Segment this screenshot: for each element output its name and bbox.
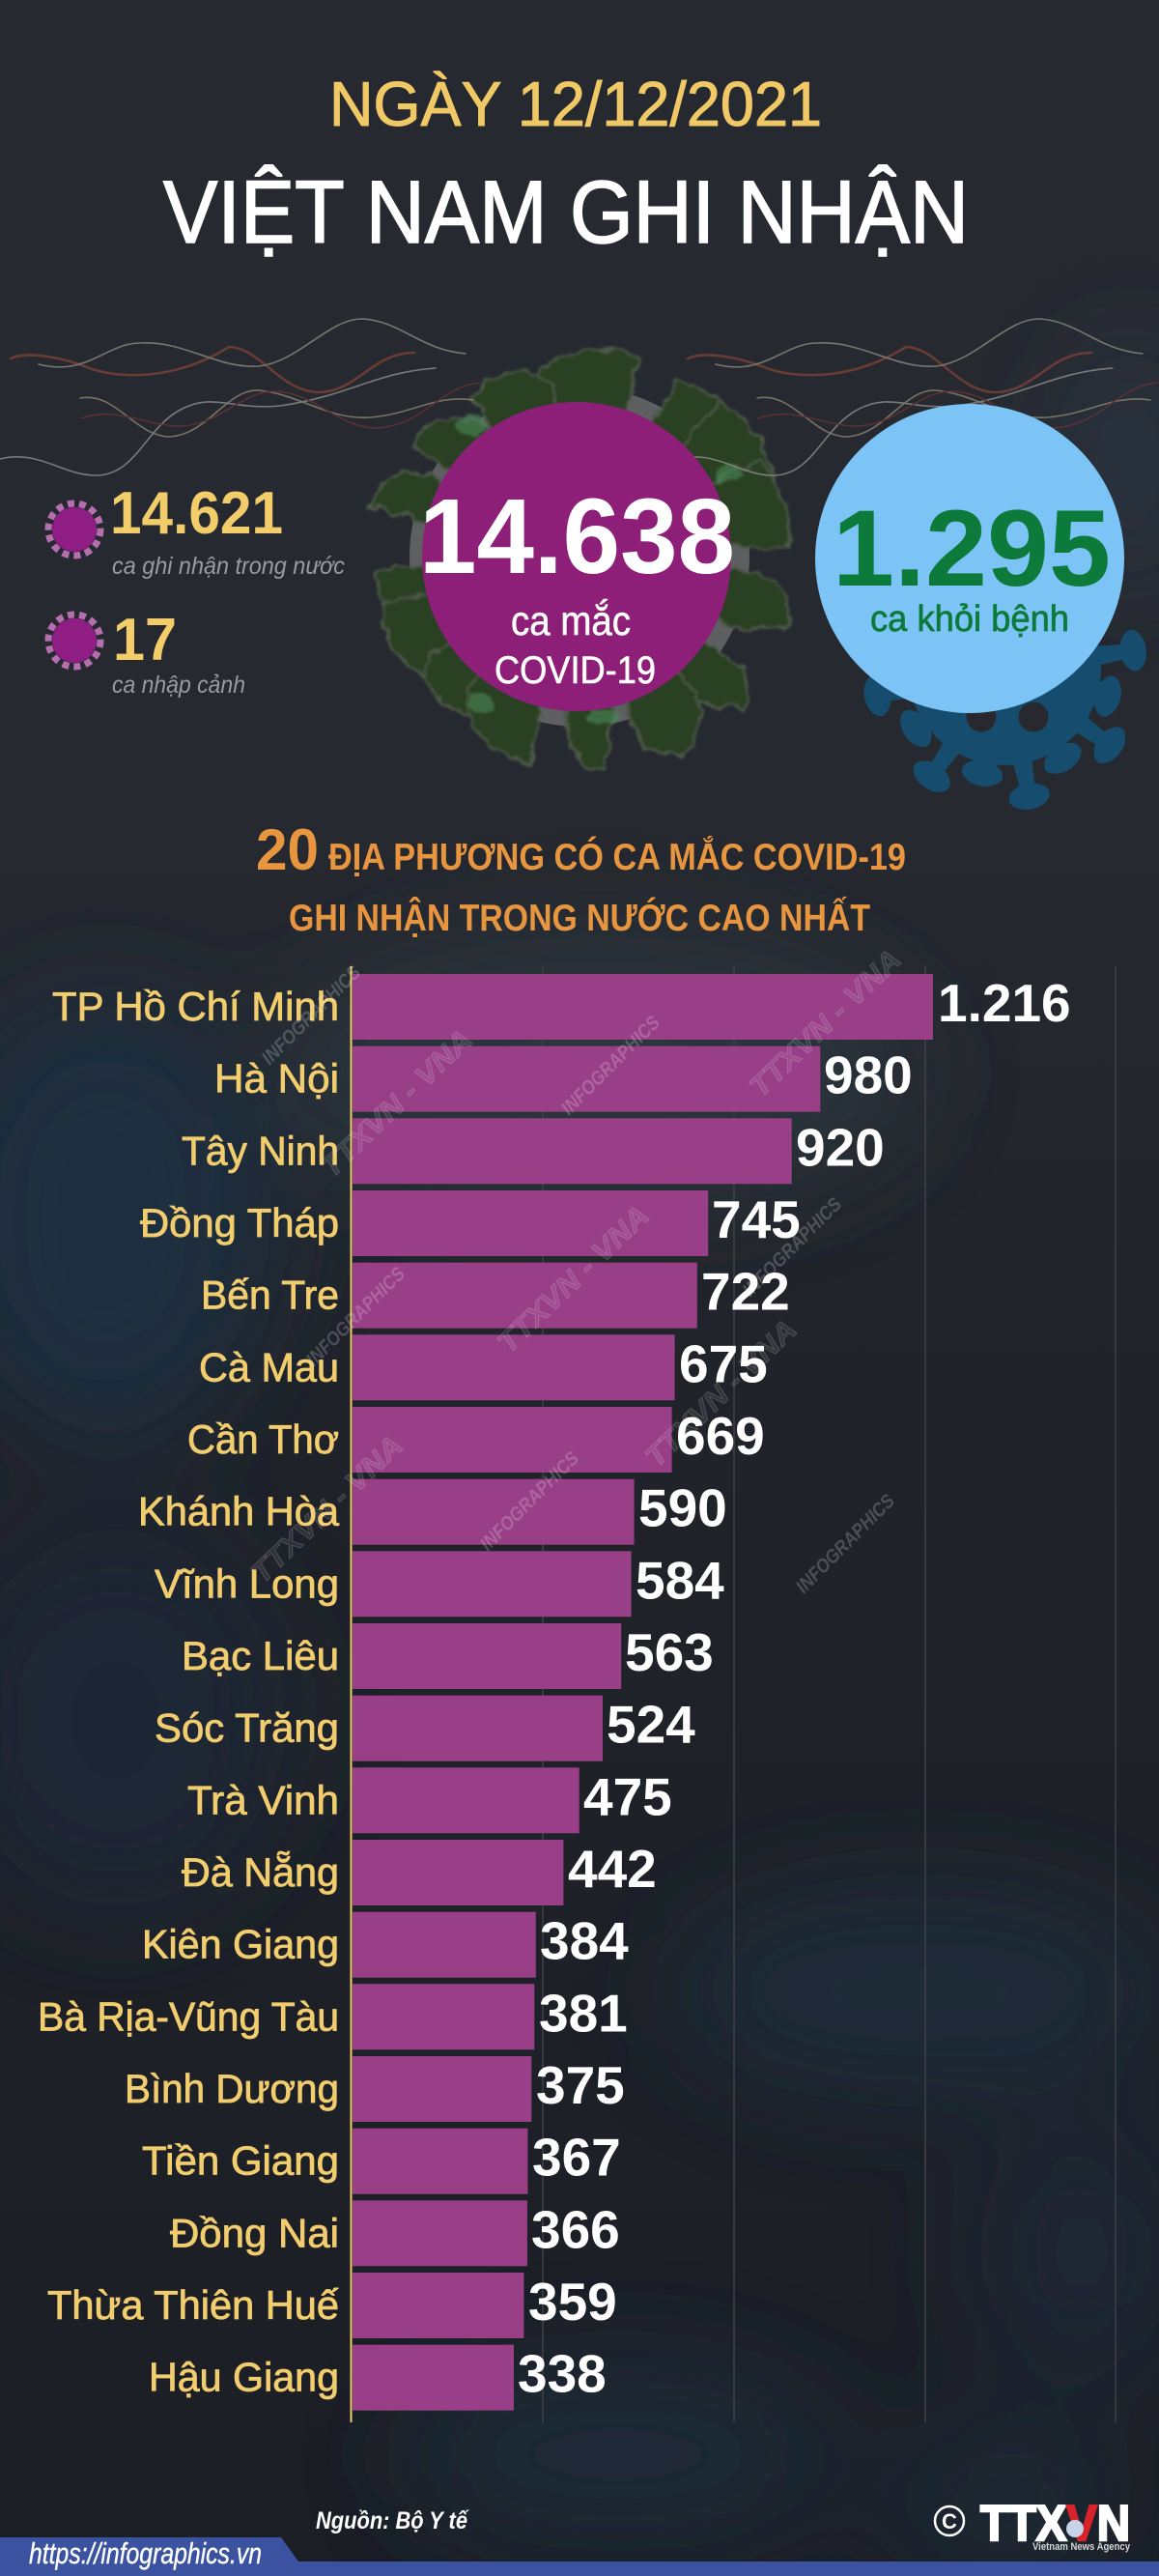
row: Cà Mau xyxy=(199,1333,768,1400)
row: Cần Thơ xyxy=(187,1406,765,1473)
panel: recovered circle xyxy=(815,404,1124,713)
row: Đồng Nai xyxy=(170,2199,620,2266)
stat: domestic cases: ca ghi nhận trong nước xyxy=(112,553,345,580)
watermarks: INFOGRAPHICS xyxy=(739,1193,846,1302)
row: Bến Tre xyxy=(201,1262,790,1329)
row: Trà Vinh xyxy=(187,1766,672,1833)
row: Bạc Liêu: Bạc Liêu xyxy=(182,1633,339,1678)
stat: imported cases: ca nhập cảnh xyxy=(112,672,245,699)
row: Đồng Nai: 366 xyxy=(531,2199,620,2259)
logo: TTXVN: Vietnam News Agency xyxy=(1032,2541,1131,2553)
row: Đà Nẵng: Đà Nẵng xyxy=(182,1849,339,1895)
watermarks: TTXVN - VNA xyxy=(315,1024,479,1184)
row: Kiên Giang: 384 xyxy=(540,1911,629,1971)
row: Hậu Giang xyxy=(149,2344,607,2411)
row: Hà Nội: 980 xyxy=(824,1045,913,1105)
decorative wave lines: left xyxy=(0,319,480,475)
panel: recovered circle: 1.295 xyxy=(833,488,1111,609)
row: Bến Tre: 722 xyxy=(701,1262,790,1322)
row: Vĩnh Long xyxy=(155,1550,724,1617)
stat: imported cases: 17 xyxy=(113,607,177,673)
stat: imported cases xyxy=(48,607,245,699)
stat: domestic cases: 14.621 xyxy=(110,480,283,547)
row: Đồng Tháp: 745 xyxy=(712,1189,801,1249)
icon: small virus imported xyxy=(48,615,100,667)
row: Khánh Hòa: Khánh Hòa xyxy=(138,1489,340,1534)
row: Khánh Hòa: 590 xyxy=(638,1478,727,1538)
row: Cà Mau: Cà Mau xyxy=(199,1344,339,1389)
row: Thừa Thiên Huế: 359 xyxy=(528,2272,617,2332)
panel: total cases circle: COVID-19 xyxy=(495,649,656,692)
icon: small virus domestic xyxy=(48,503,100,556)
row: Khánh Hòa xyxy=(138,1478,727,1545)
row: Tiền Giang: 367 xyxy=(532,2128,621,2188)
row: Đồng Nai: Đồng Nai xyxy=(170,2210,339,2255)
row: Bà Rịa-Vũng Tàu: 381 xyxy=(539,1983,628,2043)
row: Thừa Thiên Huế: Thừa Thiên Huế xyxy=(47,2282,339,2328)
watermarks xyxy=(245,944,908,1598)
row: Tiền Giang xyxy=(142,2128,621,2194)
row: Đà Nẵng: 442 xyxy=(568,1839,657,1899)
row: Tây Ninh: 920 xyxy=(796,1117,885,1177)
logo: TTXVN: TTXVN xyxy=(980,2496,1130,2552)
row: Bình Dương: 375 xyxy=(536,2055,625,2115)
row: Cần Thơ: 669 xyxy=(676,1406,765,1466)
watermarks: INFOGRAPHICS xyxy=(258,961,365,1070)
title: VIỆT NAM GHI NHẬN xyxy=(163,163,969,262)
row: TP Hồ Chí Minh: TP Hồ Chí Minh xyxy=(52,984,339,1029)
row: Đồng Tháp xyxy=(140,1189,801,1256)
row: Tiền Giang: Tiền Giang xyxy=(142,2138,339,2184)
row: Sóc Trăng: 524 xyxy=(607,1695,695,1755)
source note: Nguồn: Bộ Y tế xyxy=(316,2507,469,2534)
row: Đà Nẵng xyxy=(182,1839,657,1905)
row: Hậu Giang: 338 xyxy=(518,2344,607,2404)
row: TP Hồ Chí Minh xyxy=(52,973,1071,1040)
stat: domestic cases xyxy=(48,480,345,580)
row: Tây Ninh xyxy=(182,1117,885,1184)
panel: total cases circle: 14.638 xyxy=(419,477,735,596)
chart heading: GHI NHẬN TRONG NƯỚC CAO NHẤT xyxy=(289,897,870,939)
row: Sóc Trăng xyxy=(155,1695,695,1761)
row: Bà Rịa-Vũng Tàu xyxy=(38,1983,628,2049)
row: TP Hồ Chí Minh: 1.216 xyxy=(938,973,1071,1033)
row: Trà Vinh: 475 xyxy=(583,1766,672,1826)
watermarks: TTXVN - VNA xyxy=(245,1430,410,1589)
row: Bình Dương xyxy=(125,2055,625,2122)
row: Bến Tre: Bến Tre xyxy=(201,1273,339,1318)
watermarks: INFOGRAPHICS xyxy=(302,1263,410,1371)
panel: total cases circle: ca mắc xyxy=(511,598,631,644)
subtitle: date: NGÀY 12/12/2021 xyxy=(329,69,822,139)
row: Kiên Giang xyxy=(142,1911,629,1978)
row: Tây Ninh: Tây Ninh xyxy=(182,1128,339,1173)
row: Vĩnh Long: Vĩnh Long xyxy=(155,1560,339,1606)
logo: TTXVN: C xyxy=(942,2509,957,2533)
bar chart xyxy=(38,966,1116,2422)
footer bar: https://infographics.vn xyxy=(29,2536,262,2570)
row: Hậu Giang: Hậu Giang xyxy=(149,2355,339,2400)
panel: total cases circle xyxy=(419,402,735,711)
watermarks: TTXVN - VNA xyxy=(492,1200,656,1360)
row: Bình Dương: Bình Dương xyxy=(125,2066,339,2111)
row: Vĩnh Long: 584 xyxy=(636,1550,724,1610)
watermarks: TTXVN - VNA xyxy=(639,1314,804,1474)
row: Kiên Giang: Kiên Giang xyxy=(142,1922,339,1967)
chart heading: ĐỊA PHƯƠNG CÓ CA MẮC COVID-19 xyxy=(328,836,906,878)
watermarks: INFOGRAPHICS xyxy=(792,1490,899,1598)
chart heading xyxy=(256,817,906,939)
row: Trà Vinh: Trà Vinh xyxy=(187,1777,339,1822)
row: Thừa Thiên Huế xyxy=(47,2272,617,2338)
illustration: large green coronavirus xyxy=(372,350,789,768)
row: Bà Rịa-Vũng Tàu: Bà Rịa-Vũng Tàu xyxy=(38,1993,339,2039)
watermarks: INFOGRAPHICS xyxy=(557,1012,664,1120)
row: Hà Nội: Hà Nội xyxy=(214,1056,339,1102)
panel: recovered circle: ca khỏi bệnh xyxy=(870,599,1069,640)
row: Cà Mau: 675 xyxy=(679,1333,768,1393)
decorative wave lines: right xyxy=(677,319,1157,475)
row: Hà Nội xyxy=(214,1045,913,1112)
icon: blue virus xyxy=(861,572,1149,813)
row: Cần Thơ: Cần Thơ xyxy=(187,1417,339,1462)
footer bar xyxy=(0,2536,1159,2576)
chart heading: 20 xyxy=(256,817,319,882)
watermarks: TTXVN - VNA xyxy=(744,944,908,1103)
row: Bạc Liêu xyxy=(182,1622,714,1689)
row: Đồng Tháp: Đồng Tháp xyxy=(140,1200,339,1245)
watermarks: INFOGRAPHICS xyxy=(476,1447,583,1556)
row: Bạc Liêu: 563 xyxy=(625,1622,714,1682)
row: Sóc Trăng: Sóc Trăng xyxy=(155,1705,339,1751)
